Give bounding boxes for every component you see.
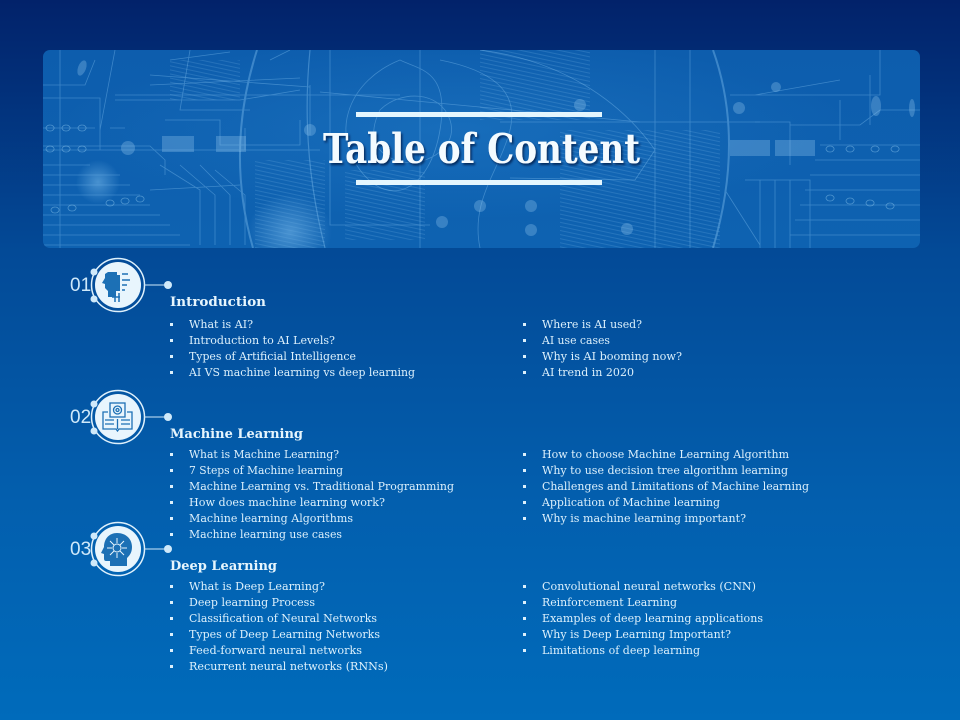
list: Machine Learning left: How does machine learning work?	[189, 495, 385, 509]
list: Machine Learning right: Why to use decision tree algorithm learning	[542, 463, 789, 477]
badge 01 with AI head icon	[90, 258, 144, 312]
section 03: Deep Learning	[70, 522, 763, 673]
list: Machine Learning left: Machine learning Algorithms	[189, 511, 353, 525]
list: Machine Learning right: How to choose Machine Learning Algorithm	[542, 447, 789, 461]
list: Deep Learning right: Convolutional neural networks (CNN)	[542, 579, 756, 593]
list: Deep Learning left: Classification of Neural Networks	[189, 611, 377, 625]
heading: Machine Learning: Machine Learning	[170, 427, 303, 442]
list: Introduction left: AI VS machine learning vs deep learning	[188, 365, 416, 379]
list: Introduction right	[523, 317, 682, 379]
list: Introduction left: Introduction to AI Levels?	[189, 333, 335, 347]
badge 03 with brain head icon	[90, 522, 144, 576]
section 02: Machine Learning	[70, 390, 810, 541]
heading: Deep Learning: Deep Learning	[170, 559, 277, 574]
title: Table of Content	[323, 125, 640, 173]
list: Deep Learning right: Why is Deep Learning Important?	[542, 627, 731, 641]
list: Machine Learning left	[170, 447, 455, 541]
title rule: top	[356, 112, 602, 117]
list: Deep Learning left: Feed-forward neural networks	[189, 643, 362, 657]
list: Machine Learning left: Machine learning use cases	[189, 527, 342, 541]
list: Introduction right: Where is AI used?	[542, 317, 642, 331]
connector 03	[144, 545, 172, 553]
list: Introduction left	[170, 317, 416, 379]
list: Deep Learning right: Limitations of deep learning	[542, 643, 701, 657]
list: Machine Learning right: Application of Machine learning	[541, 495, 721, 509]
list: Machine Learning right: Why is machine learning important?	[542, 511, 746, 525]
list: Introduction left: Types of Artificial Intelligence	[189, 349, 356, 363]
number 02: 02	[70, 407, 91, 428]
connector 02	[144, 413, 172, 421]
list: Deep Learning left: Types of Deep Learning Networks	[189, 627, 380, 641]
badge 02 with book icon	[90, 390, 144, 444]
list: Introduction right: Why is AI booming now?	[542, 349, 682, 363]
title rule: bottom	[356, 180, 602, 185]
list: Introduction right: AI trend in 2020	[541, 365, 634, 379]
list: Deep Learning left: What is Deep Learning?	[189, 579, 325, 593]
list: Deep Learning right: Reinforcement Learning	[542, 595, 678, 609]
list: Introduction right: AI use cases	[541, 333, 610, 347]
number 01: 01	[70, 275, 91, 296]
list: Deep Learning right	[523, 579, 763, 657]
list: Introduction left: What is AI?	[189, 317, 253, 331]
number 03: 03	[70, 539, 91, 560]
section 01: Introduction	[70, 258, 682, 379]
list: Deep Learning right: Examples of deep learning applications	[542, 611, 763, 625]
list: Deep Learning left: Deep learning Process	[189, 595, 315, 609]
list: Machine Learning right	[523, 447, 810, 525]
list: Machine Learning left: What is Machine Learning?	[189, 447, 339, 461]
list: Deep Learning left: Recurrent neural networks (RNNs)	[189, 659, 388, 673]
list: Machine Learning right: Challenges and Limitations of Machine learning	[542, 479, 810, 493]
connector 01	[144, 281, 172, 289]
list: Deep Learning left	[170, 579, 388, 673]
list: Machine Learning left: Machine Learning vs. Traditional Programming	[189, 479, 455, 493]
list: Machine Learning left: 7 Steps of Machine learning	[189, 463, 344, 477]
heading: Introduction: Introduction	[170, 295, 267, 310]
banner: circuit board panel	[43, 50, 920, 248]
